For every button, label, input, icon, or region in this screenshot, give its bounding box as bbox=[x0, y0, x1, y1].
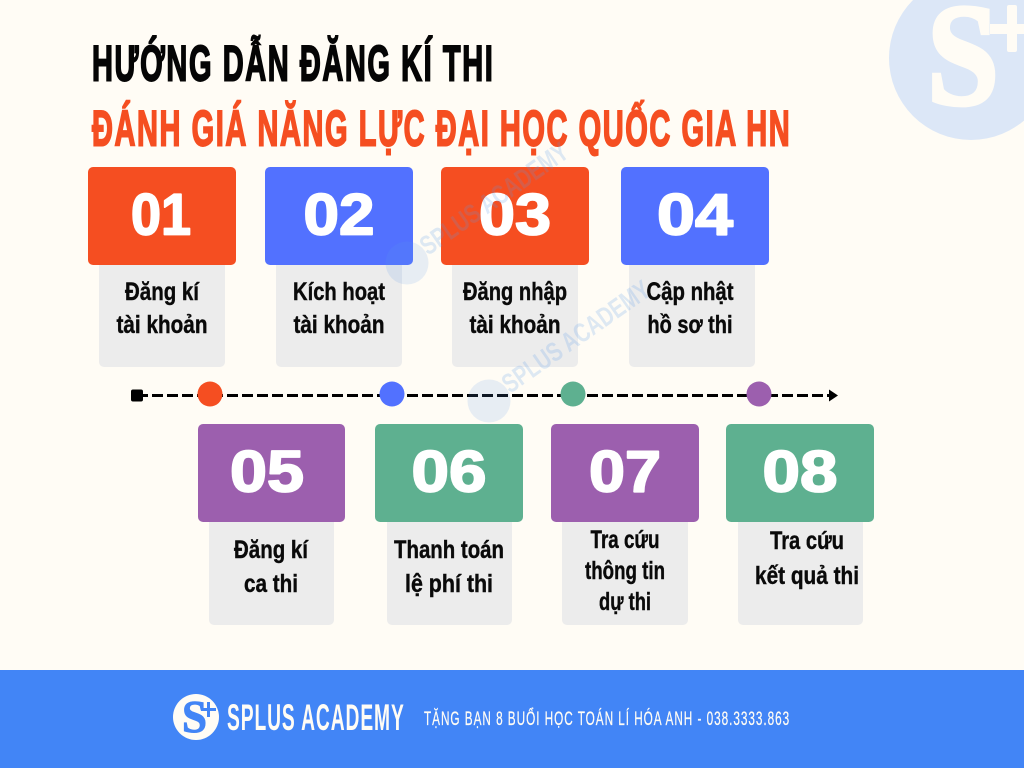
step 08: 08 bbox=[762, 440, 838, 504]
timeline dot: blue bbox=[380, 382, 404, 406]
step 01 bbox=[88, 167, 236, 367]
logo watermark: top right bbox=[889, 0, 1024, 140]
step 02: tài khoản bbox=[294, 311, 384, 339]
step 07: 07 bbox=[589, 440, 661, 504]
footer tagline: TẶNG BẠN 8 BUỔI HỌC TOÁN LÍ HÓA ANH - 038.3333.863 bbox=[424, 707, 789, 730]
footer logo: S bbox=[182, 691, 207, 742]
footer brand name: SPLUS ACADEMY bbox=[227, 697, 404, 739]
timeline dot: purple bbox=[746, 382, 772, 406]
step 05: ca thi bbox=[244, 570, 298, 598]
footer band bbox=[0, 670, 1024, 768]
step 06: Thanh toán bbox=[394, 536, 504, 564]
step 06 bbox=[375, 424, 523, 625]
watermark: upper: SPLUS ACADEMY bbox=[414, 137, 574, 261]
watermark: lower: SPLUS ACADEMY bbox=[496, 275, 656, 399]
step 07 bbox=[551, 424, 699, 625]
step 07: dự thi bbox=[599, 588, 651, 616]
step 07: thông tin bbox=[585, 557, 665, 585]
footer logo bbox=[173, 691, 219, 742]
watermark: lower bbox=[468, 275, 656, 422]
step 05: Đăng kí bbox=[234, 536, 309, 564]
step 08: Tra cứu bbox=[770, 527, 844, 555]
title line 1: HƯỚNG DẪN ĐĂNG KÍ THI bbox=[92, 35, 493, 92]
step 04 bbox=[621, 167, 769, 367]
step 02: Kích hoạt bbox=[293, 278, 386, 306]
watermark: upper bbox=[386, 137, 574, 284]
timeline arrow bbox=[131, 382, 838, 406]
step 03: Đăng nhập bbox=[463, 278, 567, 306]
step 04: hồ sơ thi bbox=[648, 311, 732, 339]
step 03 bbox=[441, 167, 589, 367]
step 01: 01 bbox=[131, 182, 191, 248]
step 03: tài khoản bbox=[470, 311, 560, 339]
step 05 bbox=[198, 424, 345, 625]
step 01: Đăng kí bbox=[125, 278, 200, 306]
title bbox=[92, 35, 790, 157]
title line 2: ĐÁNH GIÁ NĂNG LỰC ĐẠI HỌC QUỐC GIA HN bbox=[92, 100, 790, 157]
step 08: kết quả thi bbox=[755, 562, 859, 590]
timeline dot: orange bbox=[198, 382, 222, 406]
step 04: Cập nhật bbox=[646, 278, 734, 306]
step 08 bbox=[726, 424, 874, 625]
step 02 bbox=[265, 167, 413, 367]
step 03: 03 bbox=[479, 182, 551, 248]
timeline dot: green bbox=[560, 382, 586, 406]
step 06: lệ phí thi bbox=[405, 570, 493, 598]
step 06: 06 bbox=[412, 440, 486, 504]
step 01: tài khoản bbox=[116, 311, 208, 339]
step 05: 05 bbox=[230, 440, 304, 504]
step 02: 02 bbox=[304, 182, 374, 248]
step 04: 04 bbox=[657, 182, 733, 248]
step 07: Tra cứu bbox=[590, 526, 660, 554]
